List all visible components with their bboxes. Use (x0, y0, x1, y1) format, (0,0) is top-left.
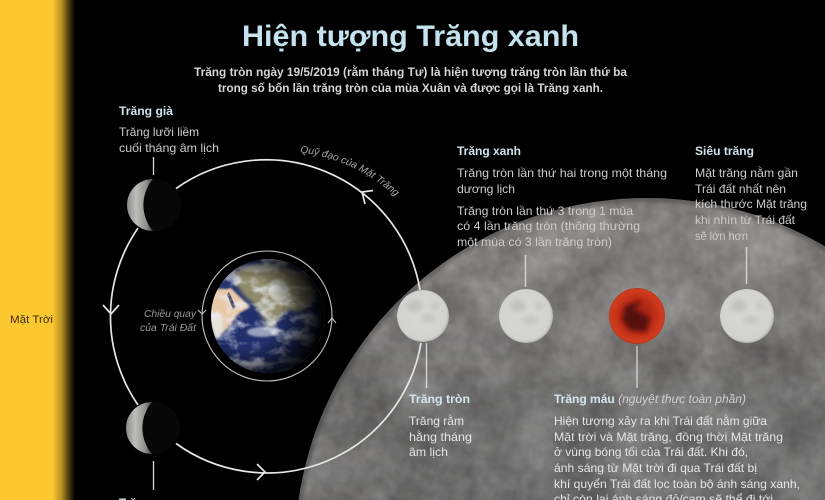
arrow: orbit top right (362, 190, 373, 204)
text: Trăng máu: ánh sáng từ Mặt trời đi qua Trái đất bị (554, 461, 757, 475)
text: Siêu trăng: khi nhìn từ Trái đất (695, 213, 796, 227)
text: Trăng tròn: âm lịch (409, 445, 448, 459)
moon: super moon (720, 289, 774, 343)
text: Trăng xanh: Trăng tròn lần thứ hai trong một tháng (457, 166, 667, 180)
diagram: Earth rotation ring (198, 251, 336, 381)
intro text: Trăng tròn ngày 19/5/2019 (rằm tháng Tư) là hiện tượng trăng tròn lần thứ ba (194, 64, 627, 79)
label: Mặt Trời: Mặt Trời (10, 314, 53, 326)
text: Trăng tròn: Trăng tròn (409, 392, 470, 406)
text: Trăng máu: Mặt trời và Mặt trăng, đồng thời Mặt trăng (554, 430, 783, 444)
text: Trăng máu (554, 392, 800, 500)
leader lines (154, 157, 746, 490)
label: Earth rotation: Chiều quay (144, 308, 197, 320)
diagram: Moon orbit (103, 160, 421, 480)
label: Earth rotation: của Trái Đất (140, 322, 197, 334)
text: Trăng xanh: có 4 lần trăng tròn (thông thường (457, 219, 640, 233)
text: Siêu trăng: sẽ lớn hơn (695, 229, 748, 243)
text: Trăng già (119, 104, 219, 155)
text: Trăng máu: khí quyển Trái đất lọc toàn bộ ánh sáng xanh, (554, 477, 800, 491)
moon: blue moon (499, 289, 553, 343)
title: Hiện tượng Trăng xanh (242, 20, 579, 53)
intro text (194, 64, 627, 95)
moon: new crescent (126, 402, 180, 454)
moon: full moon (397, 290, 449, 342)
arrow: orbit left (103, 305, 119, 314)
big moon surface (290, 190, 825, 500)
panel: Sun edge (0, 0, 75, 500)
text: Trăng xanh (457, 144, 667, 249)
moon: waning crescent (127, 179, 181, 231)
text: Trăng tròn (409, 392, 472, 459)
moon: blood moon (609, 288, 665, 344)
north sea (220, 279, 232, 289)
text: Trăng tròn: hằng tháng (409, 429, 472, 444)
clouds (211, 259, 325, 372)
text: Trăng xanh: dương lịch (457, 182, 515, 196)
label: orbit of the Moon: Quỹ đạo của Mặt Trăng (300, 146, 399, 196)
text: Trăng già: Trăng già (119, 104, 173, 118)
text: Trăng máu: ở vùng bóng tối của Trái đất. Khi đó, (554, 445, 748, 459)
text: Trăng già: Trăng lưỡi liềm (119, 125, 199, 139)
diagram: Earth (211, 259, 325, 373)
text: Siêu trăng: kích thước Mặt trăng (695, 197, 807, 211)
text: Trăng già: cuối tháng âm lịch (119, 141, 219, 155)
text: Trăng xanh: Trăng tròn lần thứ 3 trong 1 mùa (457, 204, 633, 218)
text: Trăng máu: Trăng máu (nguyệt thực toàn phần) (554, 392, 746, 406)
text: Trăng tròn: Trăng rằm (409, 413, 464, 428)
label: Earth rotation (140, 308, 197, 334)
land: Arabia and Africa (209, 287, 250, 338)
intro text: trong số bốn lần trăng tròn của mùa Xuân và được gọi là Trăng xanh. (218, 81, 603, 95)
text: Siêu trăng (695, 144, 807, 243)
text: Siêu trăng: Trái đất nhất nên (695, 182, 786, 196)
text: Trăng xanh: Trăng xanh (457, 144, 521, 158)
arrow: orbit bottom (257, 464, 265, 480)
sea (227, 292, 236, 309)
text: Trăng xanh: một mùa có 3 lần trăng tròn) (457, 235, 612, 249)
text: Siêu trăng: Mặt trăng nằm gần (695, 165, 798, 180)
text: Siêu trăng: Siêu trăng (695, 144, 754, 158)
text: Trăng máu: Hiện tượng xảy ra khi Trái đất nằm giữa (554, 413, 767, 428)
land: Asia (234, 264, 315, 330)
